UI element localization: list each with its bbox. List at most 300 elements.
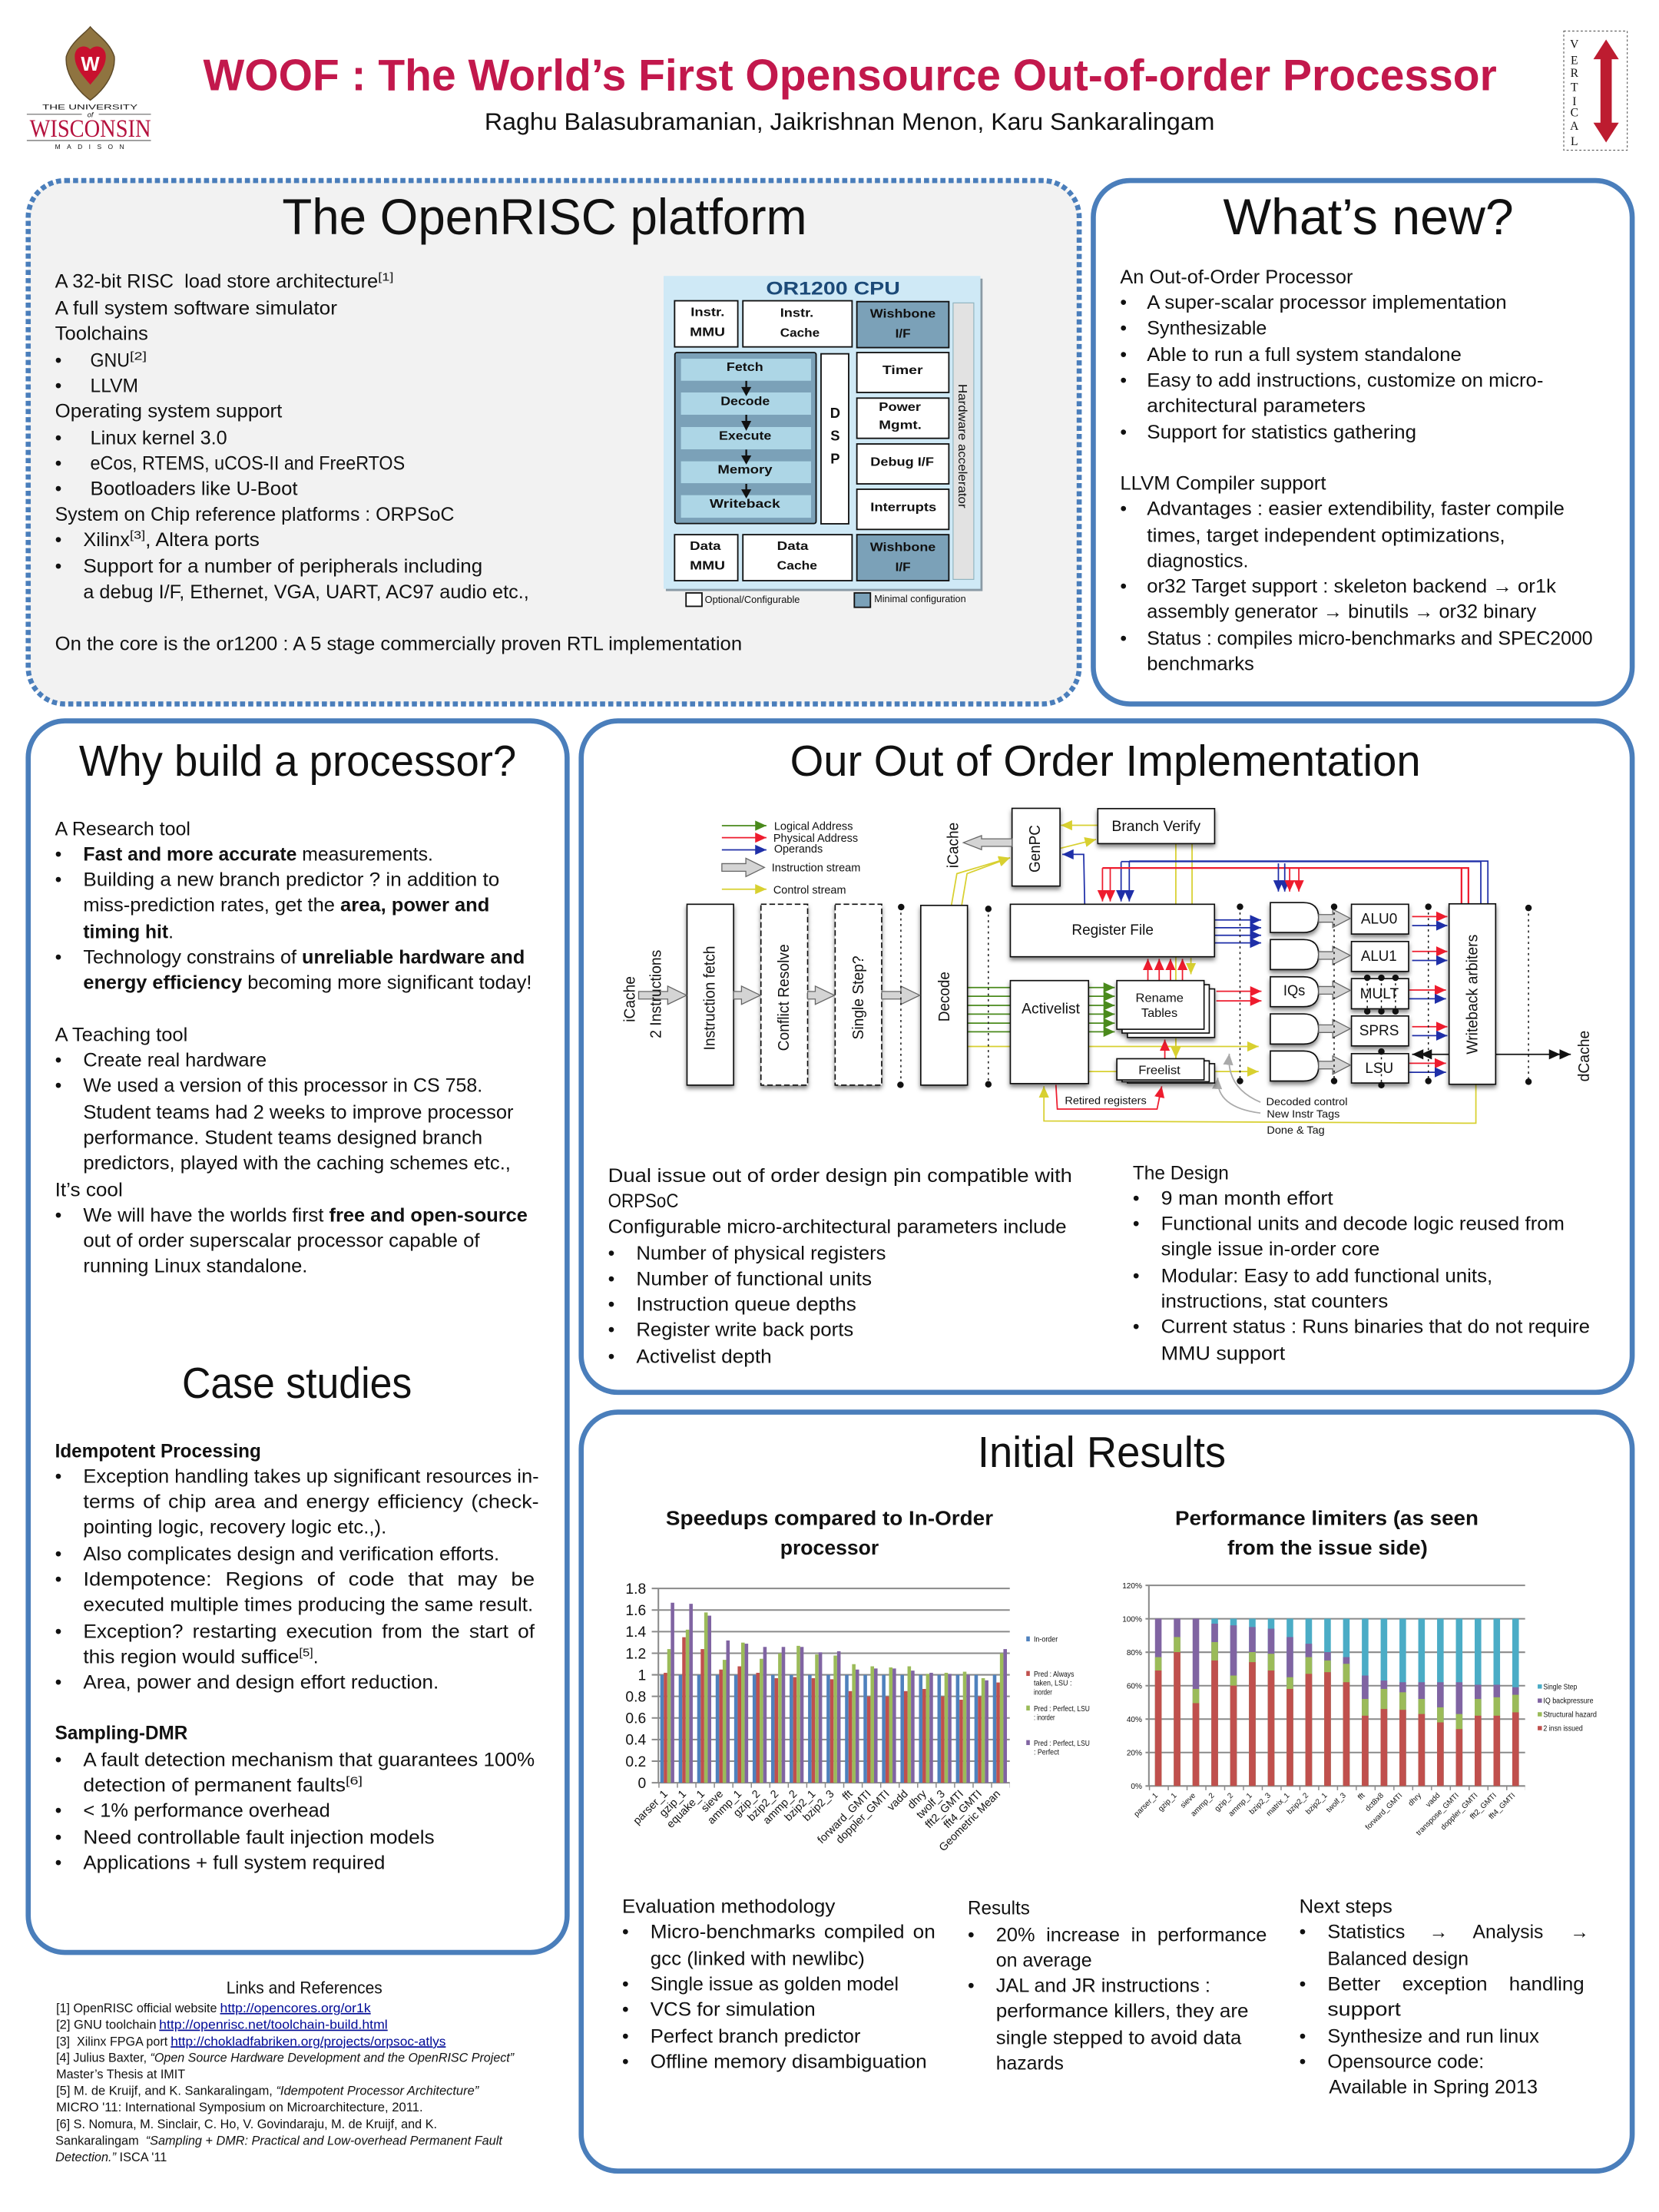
- text block: results: single stepped to avoid data: [996, 2028, 1242, 2048]
- text block: evaluation methodology: Perfect branch predictor: [651, 2027, 860, 2048]
- text block: •: [55, 376, 61, 397]
- text block: energy efficiency becoming more significant today!: [83, 973, 531, 994]
- y axis labels: 1.8: [625, 1581, 646, 1598]
- x axis labels: ammp_1: [1227, 1791, 1254, 1819]
- logo wordmark: of: [88, 111, 94, 118]
- panel frame: [581, 721, 1632, 1392]
- text block: A super-scalar processor implementation: [1147, 293, 1507, 313]
- reference list: MICRO '11: International Symposium on Microarchitecture, 2011.: [56, 2100, 423, 2114]
- text block: •: [55, 1076, 61, 1097]
- heading: Our Out of Order Implementation: [790, 737, 1421, 786]
- text block: next steps: Opensource code:: [1327, 2052, 1484, 2073]
- vertical letters: R: [1571, 67, 1579, 80]
- text block: eCos, RTEMS, uCOS-II and FreeRTOS: [91, 454, 405, 475]
- text block: •: [55, 479, 61, 500]
- diagram: OR1200 CPU block diagram: P: [830, 450, 839, 466]
- reference list: Detection.” ISCA '11: [55, 2150, 167, 2164]
- vertical letters: E: [1571, 55, 1578, 68]
- text block: running Linux standalone.: [83, 1257, 307, 1277]
- text block: •: [55, 530, 61, 551]
- y axis labels: 1.6: [625, 1603, 646, 1619]
- diagram: OR1200 CPU block diagram: Interrupts: [870, 502, 936, 515]
- bar chart: speedups: [625, 1581, 1090, 1854]
- chart heading: performance limiters: from the issue side): [1227, 1538, 1428, 1559]
- x axis labels: twolf_3: [1325, 1791, 1348, 1814]
- chart legend: Pred : Perfect, LSU: [1034, 1705, 1090, 1714]
- x axis labels: parser_1: [631, 1788, 671, 1827]
- text block: design parameters: •: [608, 1294, 614, 1315]
- vertical letters: I: [1572, 95, 1576, 108]
- text block: [1]: [378, 272, 393, 284]
- x axis labels: fft4_GMTI: [942, 1788, 985, 1831]
- text block: next steps: →: [1570, 1922, 1589, 1943]
- text block: the design: •: [1133, 1317, 1140, 1338]
- reference list: [1] OpenRISC official website: [56, 2001, 217, 2015]
- reference list: [55, 2001, 515, 2164]
- text block: Able to run a full system standalone: [1147, 345, 1462, 366]
- y axis labels: 0.4: [625, 1733, 646, 1749]
- chart heading: performance limiters: Performance limiters (as seen: [1175, 1508, 1479, 1530]
- text block: •: [55, 1544, 61, 1565]
- text block: •: [55, 1801, 61, 1822]
- diagram: OR1200 CPU block diagram: Instr.: [690, 306, 724, 320]
- vertical letters: A: [1570, 120, 1579, 133]
- text block: next steps: •: [1300, 2027, 1306, 2048]
- diagram: OR1200 CPU block diagram: Minimal configuration: [874, 593, 966, 604]
- text block: Operating system support: [55, 402, 282, 422]
- text block: results: •: [968, 1975, 975, 1996]
- x axis labels: gzip_1: [657, 1788, 689, 1820]
- x axis labels: gzip_2: [731, 1788, 763, 1820]
- text block: performance. Student teams designed branch: [83, 1128, 482, 1149]
- text block: evaluation methodology: •: [622, 2027, 629, 2048]
- text block: A Research tool: [55, 819, 190, 839]
- dotted pipeline dividers: [901, 907, 1528, 1085]
- diagram: OR1200 CPU block diagram: S: [830, 427, 839, 443]
- text block: Synthesizable: [1147, 318, 1267, 339]
- diagram labels: Register File: [1071, 922, 1154, 939]
- connection lines: [952, 825, 1571, 1123]
- diagram labels: ALU0: [1361, 912, 1397, 928]
- x axis labels: forward_GMTI: [1364, 1792, 1404, 1832]
- chart legend: 2 insn issued: [1543, 1724, 1583, 1733]
- diagram: OR1200 CPU block diagram: Cache: [780, 327, 820, 340]
- text block: architectural parameters: [1147, 396, 1366, 416]
- text block: evaluation methodology: Offline memory disambiguation: [651, 2052, 927, 2073]
- diagram labels: Decoded control: [1266, 1096, 1347, 1108]
- panel: Our Out of Order Implementation: [581, 721, 1632, 1392]
- text block: next steps: Available in Spring 2013: [1329, 2078, 1538, 2098]
- x axis labels: ammp_2: [1190, 1791, 1217, 1819]
- x axis labels: doppler_GMTI: [1439, 1792, 1479, 1832]
- logo wordmark: [27, 104, 151, 151]
- text block: the design: •: [1133, 1267, 1140, 1287]
- text block: the design: Functional units and decode logic reused from: [1161, 1214, 1565, 1235]
- y axis labels: 0.6: [625, 1711, 646, 1727]
- x axis labels: bzip2_2: [745, 1788, 781, 1824]
- diagram: OR1200 CPU block diagram: Mgmt.: [879, 419, 922, 432]
- text block: or32 Target support : skeleton backend → or1k: [1147, 576, 1557, 597]
- text block: Building a new branch predictor ? in addition to: [83, 869, 499, 890]
- reference list: http://openrisc.net/toolchain-build.html: [159, 2018, 388, 2032]
- vertical letters: V: [1570, 38, 1579, 51]
- x axis labels: bzip2_1: [783, 1788, 818, 1824]
- text block: assembly generator → binutils → or32 binary: [1147, 601, 1537, 622]
- text block: diagnostics.: [1147, 551, 1249, 571]
- diagram labels: Branch Verify: [1111, 819, 1200, 835]
- chart legend: Single Step: [1543, 1683, 1578, 1691]
- diagram legend: Logical Address: [774, 820, 853, 833]
- diagram: out of order pipeline: [622, 808, 1593, 1136]
- x axis labels: parser_1: [1133, 1791, 1160, 1819]
- text block: miss-prediction rates, get the area, power and: [83, 896, 489, 916]
- text block: results: •: [968, 1925, 975, 1945]
- text block: < 1% performance overhead: [83, 1801, 330, 1822]
- stage boxes: [687, 808, 1495, 1085]
- diagram labels: Single Step?: [850, 955, 867, 1039]
- text block: results: hazards: [996, 2053, 1064, 2074]
- diagram: OR1200 CPU block diagram: Data: [690, 540, 721, 553]
- text block: [5]: [299, 1647, 313, 1659]
- text block: Advantages : easier extendibility, faster compile: [1147, 498, 1565, 519]
- text block: •: [1120, 576, 1127, 597]
- text block: design parameters: •: [608, 1346, 614, 1367]
- text block: [55, 1441, 539, 1874]
- icon: crest: W: [81, 54, 100, 75]
- text block: •: [55, 1051, 61, 1071]
- heading: Why build a processor?: [79, 737, 516, 786]
- text block: LLVM: [91, 376, 138, 397]
- x axis labels: bzip2_3: [801, 1788, 836, 1824]
- text block: Easy to add instructions, customize on micro-: [1147, 370, 1543, 391]
- text block: [55, 819, 531, 1277]
- text block: A 32-bit RISC load store architecture: [55, 272, 378, 293]
- x axis labels: fft: [840, 1788, 856, 1803]
- text block: design parameters: Instruction queue depths: [636, 1294, 856, 1315]
- diagram labels: Freelist: [1138, 1064, 1181, 1077]
- diagram: OR1200 CPU block diagram: I/F: [896, 327, 911, 340]
- logo: Vertical group: [1564, 31, 1628, 151]
- diagram labels: Retired registers: [1065, 1094, 1147, 1106]
- text block: next steps: support: [1327, 2000, 1401, 2021]
- x axis labels: sieve: [699, 1788, 726, 1815]
- text block: •: [1120, 628, 1127, 649]
- y axis labels: 80%: [1127, 1649, 1142, 1657]
- y axis labels: 1.4: [625, 1624, 646, 1641]
- text block: design parameters: Dual issue out of order design pin compatible with: [608, 1166, 1072, 1187]
- panel: Links and References: [55, 1978, 515, 2164]
- x axis labels: bzip2_1: [1304, 1791, 1330, 1816]
- y axis labels: 120%: [1122, 1582, 1142, 1591]
- diagram: OR1200 CPU block diagram: Cache: [777, 560, 817, 573]
- diagram labels: Writeback arbiters: [1464, 935, 1481, 1055]
- text block: design parameters: [608, 1166, 1072, 1367]
- heading: The OpenRISC platform: [282, 189, 807, 246]
- diagram: OR1200 CPU block diagram: Data: [777, 540, 809, 553]
- text block: •: [55, 429, 61, 449]
- chart legend: Pred : Perfect, LSU: [1034, 1740, 1090, 1748]
- text block: design parameters: Number of functional units: [636, 1269, 872, 1290]
- x axis labels: forward_GMTI: [816, 1788, 874, 1846]
- x axis labels: bzip2_3: [1248, 1791, 1273, 1816]
- diagram labels: ALU1: [1361, 949, 1397, 965]
- text block: the design: The Design: [1133, 1164, 1229, 1184]
- diagram legend: Physical Address: [773, 833, 858, 845]
- x axis labels: bzip2_2: [1286, 1791, 1310, 1816]
- text block: results: performance killers, they are: [996, 2002, 1249, 2022]
- text block: times, target independent optimizations,: [1147, 525, 1505, 546]
- y axis labels: 60%: [1127, 1682, 1142, 1690]
- text block: evaluation methodology: •: [622, 2000, 629, 2021]
- chart legend: IQ backpressure: [1543, 1697, 1594, 1705]
- x axis labels: ammp_2: [761, 1788, 800, 1827]
- text block: timing hit.: [83, 922, 174, 942]
- text block: [2]: [130, 350, 147, 363]
- text block: It’s cool: [55, 1181, 123, 1201]
- diagram legend: [722, 820, 860, 896]
- text block: the design: [1133, 1164, 1590, 1365]
- text block: •: [1120, 345, 1127, 366]
- text block: next steps: Statistics: [1327, 1922, 1405, 1943]
- text block: Sampling-DMR: [55, 1724, 187, 1744]
- text block: the design: •: [1133, 1189, 1140, 1210]
- chart heading: speedups: [666, 1508, 993, 1559]
- reference list: [2] GNU toolchain: [56, 2018, 157, 2032]
- diagram: OR1200 CPU block diagram: I/F: [896, 561, 911, 574]
- text block: evaluation methodology: gcc (linked with newlibc): [651, 1949, 865, 1970]
- heading: Links and References: [227, 1978, 382, 1997]
- diagram: OR1200 CPU block diagram: Wishbone: [870, 541, 936, 554]
- logo: University of Wisconsin-Madison: [27, 27, 151, 151]
- logo wordmark: THE UNIVERSITY: [42, 104, 137, 111]
- text block: •: [55, 1569, 61, 1590]
- text block: design parameters: •: [608, 1320, 614, 1340]
- text block: next steps: Better exception handling: [1327, 1975, 1584, 1995]
- text block: evaluation methodology: Single issue as golden model: [651, 1975, 899, 1995]
- text block: [6]: [346, 1775, 363, 1787]
- diagram: OR1200 CPU block diagram: Fetch: [727, 361, 763, 374]
- diagram: OR1200 CPU block diagram: Execute: [719, 429, 772, 442]
- diagram labels: GenPC: [1027, 825, 1044, 873]
- text block: executed multiple times producing the same result.: [83, 1595, 533, 1616]
- diagram: OR1200 CPU block diagram: OR1200 CPU: [766, 278, 900, 299]
- x axis labels: gzip_1: [1157, 1791, 1179, 1813]
- authors: Raghu Balasubramanian, Jaikrishnan Menon, Karu Sankaralingam: [485, 108, 1214, 135]
- text block: results: JAL and JR instructions :: [996, 1975, 1210, 1996]
- x axis labels: fft2_GMTI: [923, 1788, 966, 1831]
- x axis labels: vadd: [885, 1788, 911, 1813]
- icon: double arrow: [1594, 39, 1619, 143]
- diagram: OR1200 CPU block diagram: Writeback: [710, 498, 780, 511]
- reference list: Master’s Thesis at IMIT: [56, 2067, 185, 2081]
- diagram labels: 2 Instructions: [648, 950, 665, 1038]
- text block: •: [55, 947, 61, 968]
- diagram: OR1200 CPU block diagram: Hardware accelerator: [955, 384, 969, 508]
- text block: System on Chip reference platforms : ORPSoC: [55, 505, 454, 525]
- diagram legend: Control stream: [773, 884, 846, 896]
- panel frame: [28, 180, 1079, 704]
- x axis labels: ammp_1: [705, 1788, 744, 1827]
- stacked bar chart: performance limiters: [1122, 1582, 1597, 1837]
- chart heading: speedups: processor: [780, 1538, 879, 1559]
- text block: design parameters: •: [608, 1269, 614, 1290]
- text block: pointing logic, recovery logic etc.,).: [83, 1518, 386, 1538]
- text block: •: [1120, 498, 1127, 519]
- x axis labels: sieve: [1179, 1791, 1197, 1810]
- x axis labels: dhry: [906, 1787, 929, 1812]
- y axis labels: 0%: [1131, 1783, 1142, 1791]
- text block: results: 20% increase in performance: [996, 1925, 1267, 1945]
- reference list: http://opencores.org/or1k: [220, 2001, 371, 2015]
- text block: design parameters: Register write back ports: [636, 1320, 853, 1340]
- text block: •: [55, 844, 61, 865]
- text block: Fast and more accurate measurements.: [83, 844, 433, 865]
- x axis labels: Geometric Mean: [937, 1788, 1003, 1854]
- text block: design parameters: Activelist depth: [636, 1346, 772, 1367]
- diagram labels: New Instr Tags: [1267, 1108, 1339, 1120]
- x axis labels: vadd: [1424, 1792, 1442, 1809]
- text block: evaluation methodology: Evaluation methodology: [622, 1897, 836, 1918]
- chart legend: [1538, 1683, 1597, 1733]
- text block: evaluation methodology: •: [622, 1975, 629, 1995]
- diagram labels: LSU: [1365, 1061, 1393, 1077]
- text block: results: Results: [968, 1898, 1030, 1919]
- text block: the design: instructions, stat counters: [1161, 1292, 1388, 1313]
- text block: Bootloaders like U-Boot: [91, 479, 298, 500]
- x axis labels: dhry: [1407, 1791, 1423, 1808]
- diagram labels: Conflict Resolve: [776, 944, 793, 1051]
- text block: We will have the worlds first free and open-source: [83, 1206, 528, 1227]
- diagram: OR1200 CPU block diagram: D: [830, 405, 840, 421]
- diagram: OR1200 CPU block diagram: Power: [879, 401, 921, 414]
- panel: What's new?: [1093, 180, 1632, 704]
- x axis labels: doppler_GMTI: [834, 1788, 892, 1846]
- text block: Toolchains: [55, 324, 148, 345]
- text block: An Out-of-Order Processor: [1120, 267, 1353, 288]
- diagram labels: [622, 819, 1593, 1136]
- text block: evaluation methodology: Micro-benchmarks compiled on: [651, 1922, 935, 1943]
- text block: terms of chip area and energy efficiency (check-: [83, 1492, 539, 1512]
- text block: •: [55, 557, 61, 578]
- text block: Idempotent Processing: [55, 1441, 261, 1462]
- text block: GNU: [91, 351, 130, 372]
- diagram: OR1200 CPU block diagram: [664, 276, 982, 608]
- heading: Initial Results: [978, 1428, 1226, 1477]
- text block: •: [55, 1673, 61, 1694]
- text block: design parameters: Number of physical registers: [636, 1243, 886, 1264]
- panel: The OpenRISC platform: [28, 180, 1079, 704]
- text block: next steps: →: [1429, 1922, 1448, 1943]
- y axis labels: [1122, 1582, 1142, 1791]
- text block: •: [1120, 422, 1127, 443]
- text block: .: [313, 1647, 319, 1668]
- vertical letters: [1570, 38, 1579, 148]
- chart legend: [1026, 1636, 1090, 1757]
- y axis labels: 40%: [1127, 1716, 1142, 1724]
- text block: LLVM Compiler support: [1120, 473, 1326, 494]
- text block: evaluation methodology: •: [622, 1922, 629, 1943]
- text block: •: [55, 869, 61, 890]
- reference list: [5] M. de Kruijf, and K. Sankaralingam, “Idempotent Processor Architecture”: [56, 2084, 480, 2098]
- text block: design parameters: •: [608, 1243, 614, 1264]
- text block: , Altera ports: [145, 530, 260, 551]
- text block: results: [968, 1898, 1267, 2074]
- text block: Support for statistics gathering: [1147, 422, 1416, 443]
- chart legend: inorder: [1034, 1688, 1052, 1697]
- text block: next steps: •: [1300, 1922, 1306, 1943]
- divider dots: [897, 903, 1532, 1088]
- diagram labels: Decode: [936, 972, 953, 1022]
- y axis labels: 1: [638, 1667, 646, 1684]
- y axis labels: 20%: [1127, 1749, 1142, 1757]
- title: WOOF : The World’s First Opensource Out-of-order Processor: [203, 51, 1497, 101]
- x axis labels: fft: [1356, 1791, 1367, 1802]
- text block: the design: Current status : Runs binaries that do not require: [1161, 1317, 1590, 1338]
- text block: evaluation methodology: [622, 1897, 935, 2073]
- icon: crest: [66, 27, 114, 100]
- text block: •: [1120, 370, 1127, 391]
- diagram labels: dCache: [1576, 1031, 1593, 1081]
- diagram labels: SPRS: [1359, 1023, 1399, 1039]
- text block: [55, 272, 742, 655]
- text block: evaluation methodology: VCS for simulation: [651, 2000, 816, 2021]
- text block: this region would suffice: [83, 1647, 299, 1668]
- text block: •: [55, 1466, 61, 1487]
- text block: a debug I/F, Ethernet, VGA, UART, AC97 audio etc.,: [83, 582, 529, 603]
- diagram: OR1200 CPU block diagram: Debug I/F: [870, 456, 934, 469]
- y axis labels: 0.2: [625, 1754, 646, 1770]
- text block: •: [55, 454, 61, 475]
- chart legend: In-order: [1034, 1636, 1058, 1644]
- text block: •: [55, 351, 61, 372]
- diagram labels: iCache: [945, 823, 962, 868]
- diagram labels: Done & Tag: [1267, 1124, 1325, 1136]
- vertical letters: C: [1571, 107, 1578, 120]
- chart legend: Structural hazard: [1543, 1710, 1597, 1719]
- heading: What’s new?: [1223, 189, 1514, 246]
- text block: Student teams had 2 weeks to improve processor: [83, 1103, 514, 1124]
- diagram: OR1200 CPU block diagram: Memory: [717, 464, 773, 477]
- text block: Create real hardware: [83, 1051, 267, 1071]
- text block: •: [55, 1621, 61, 1642]
- x axis labels: [631, 1787, 1003, 1854]
- panel: Why build a processor? and Case studies: [28, 721, 567, 1952]
- text block: Xilinx: [83, 530, 131, 551]
- text block: A fault detection mechanism that guarantees 100%: [83, 1750, 535, 1771]
- x axis labels: transpose_GMTI: [1415, 1792, 1461, 1837]
- block arrows: [638, 836, 1350, 1075]
- text block: detection of permanent faults: [83, 1776, 346, 1796]
- text block: design parameters: Configurable micro-architectural parameters include: [608, 1217, 1067, 1237]
- chart heading: performance limiters: [1175, 1508, 1479, 1559]
- diagram: OR1200 CPU block diagram: Instr.: [780, 307, 813, 320]
- chart legend: Pred : Always: [1034, 1671, 1074, 1679]
- text block: results: on average: [996, 1950, 1092, 1971]
- y axis labels: [625, 1581, 646, 1792]
- text block: the design: 9 man month effort: [1161, 1189, 1333, 1210]
- heading: Case studies: [182, 1359, 412, 1408]
- diagram: OR1200 CPU block diagram: MMU: [690, 560, 725, 573]
- chart legend: taken, LSU :: [1034, 1679, 1072, 1687]
- diagram: OR1200 CPU block diagram: Decode: [720, 396, 770, 409]
- diagram legend: Operands: [774, 843, 823, 856]
- text block: On the core is the or1200 : A 5 stage commercially proven RTL implementation: [55, 634, 742, 655]
- text block: •: [55, 1853, 61, 1874]
- diagram labels: Activelist: [1022, 1002, 1081, 1018]
- x axis labels: equake_1: [664, 1788, 707, 1831]
- x axis labels: [1133, 1791, 1517, 1837]
- text block: A full system software simulator: [55, 299, 337, 320]
